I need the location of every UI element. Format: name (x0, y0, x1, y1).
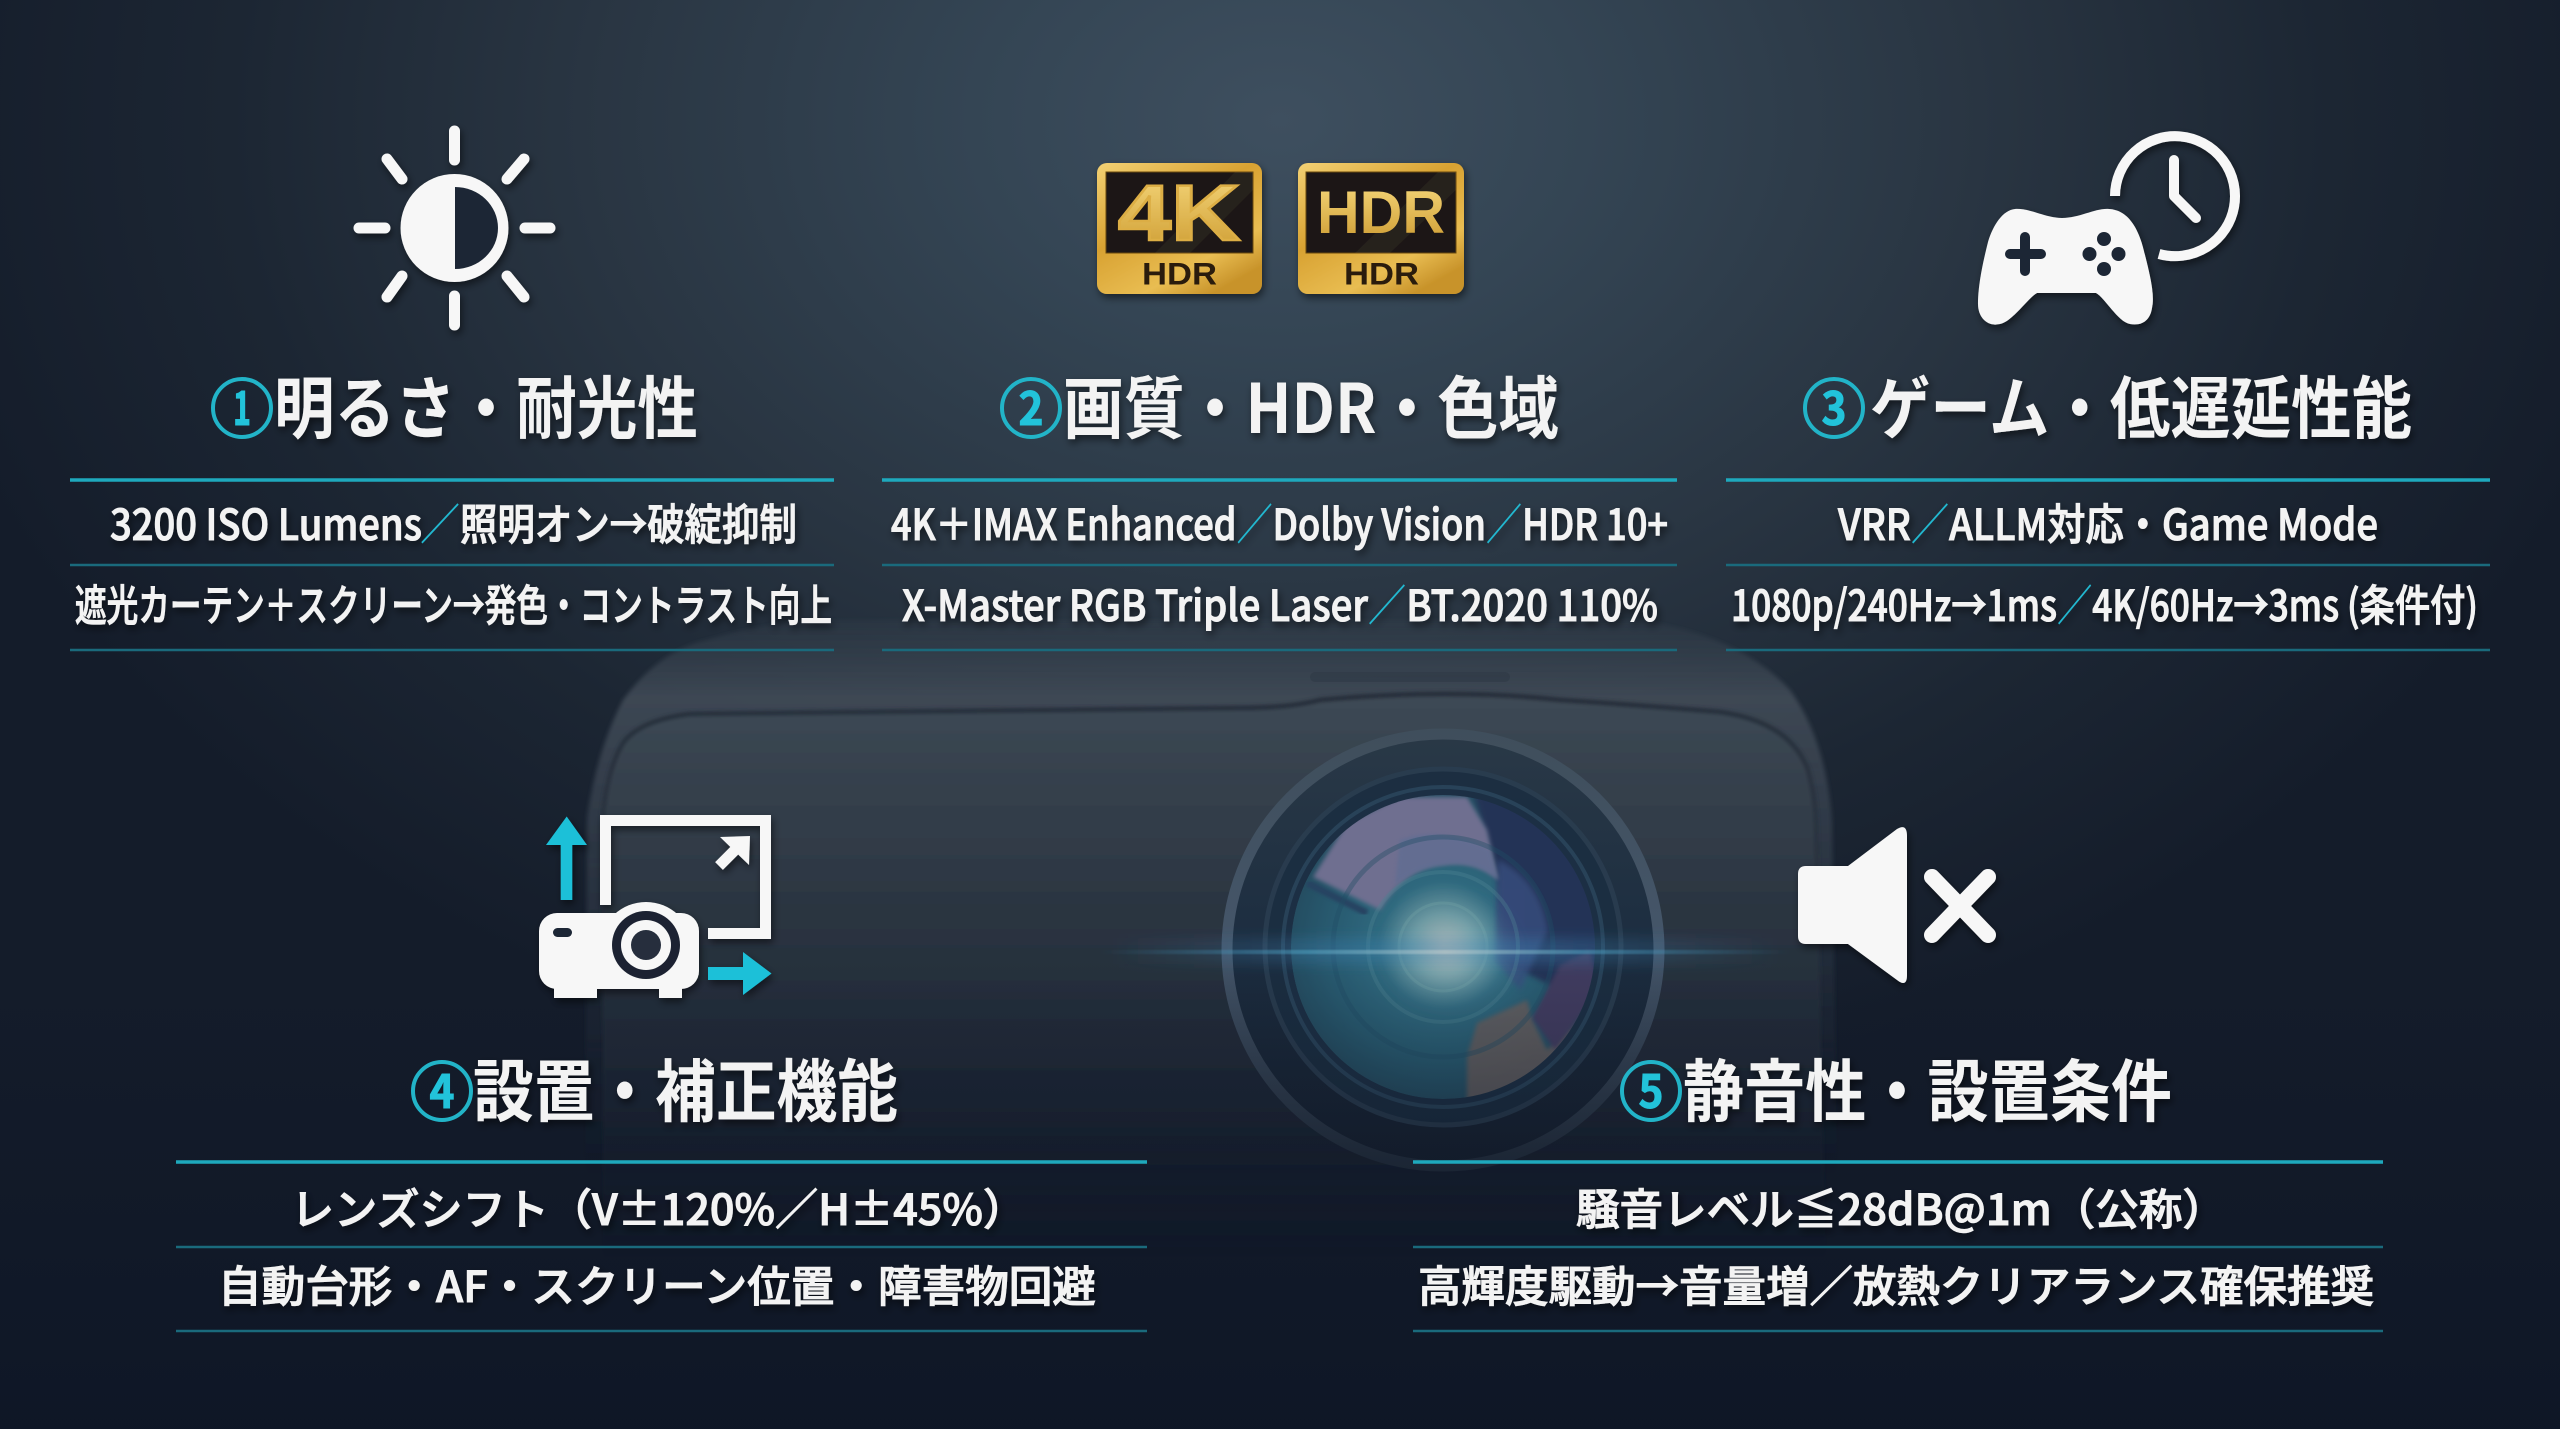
spec list: VRR／ALLM対応・Game Mode (1837, 491, 2378, 553)
panel: gaming latency (1726, 136, 2490, 650)
panel: brightness (70, 131, 834, 650)
panel: quietness (1413, 827, 2383, 1331)
heading: 画質・HDR・色域 (1063, 354, 1559, 453)
icon: 4K HDR badge (1097, 163, 1262, 294)
spec list: 遮光カーテン＋スクリーン→発色・コントラスト向上 (75, 572, 832, 634)
lens (1227, 734, 1659, 1166)
spec list (70, 480, 834, 650)
spec list: 照明オン→破綻抑制 (460, 491, 797, 553)
spec list: 高輝度駆動→音量増／放熱クリアランス確保推奨 (1418, 1253, 2374, 1315)
spec list: ／ (420, 491, 460, 553)
heading: 静音性・設置条件 (1683, 1037, 2172, 1136)
spec list: X-Master RGB Triple Laser／BT.2020 110% (902, 572, 1658, 634)
panel: picture quality (882, 163, 1677, 650)
spec list (882, 480, 1677, 650)
spec list: 1080p/240Hz→1ms／4K/60Hz→3ms (条件付) (1731, 572, 2478, 634)
icon: HDR badge (1298, 163, 1464, 294)
spec list (176, 1162, 1147, 1331)
heading: 2 (1018, 373, 1044, 439)
icon: muted speaker (1798, 827, 1988, 983)
panel: installation and correction (176, 816, 1147, 1331)
icon: 4K HDR badge: HDR (1142, 256, 1217, 292)
spec list: 3200 ISO Lumens (110, 491, 422, 553)
heading: 3 (1822, 373, 1846, 439)
heading: 5 (1638, 1056, 1664, 1122)
icon: HDR badge: HDR (1344, 256, 1419, 292)
heading: 設置・補正機能 (473, 1037, 898, 1136)
lens flare (1100, 896, 1790, 1008)
spec list: レンズシフト（V±120%／H±45%） (291, 1176, 1026, 1238)
heading: 明るさ・耐光性 (274, 354, 698, 453)
projector photograph (586, 630, 1834, 1172)
icon: 4K HDR badge: 4K (1118, 168, 1240, 257)
heading: 1 (233, 373, 251, 439)
spec list (1726, 480, 2490, 650)
spec list (1413, 1162, 2383, 1331)
heading: ゲーム・低遅延性能 (1870, 354, 2412, 453)
icon: projector with shift arrows (539, 816, 772, 998)
spec list: 4K＋IMAX Enhanced／Dolby Vision／HDR 10+ (891, 491, 1668, 553)
bottom fade (0, 700, 2560, 1429)
spec list: 自動台形・AF・スクリーン位置・障害物回避 (218, 1253, 1096, 1315)
spec list: 騒音レベル≦28dB@1m（公称） (1576, 1176, 2226, 1238)
icon: controller and clock (1978, 136, 2235, 325)
icon: sun (359, 131, 550, 325)
heading: 4 (430, 1056, 454, 1122)
icon: HDR badge: HDR (1317, 179, 1445, 246)
